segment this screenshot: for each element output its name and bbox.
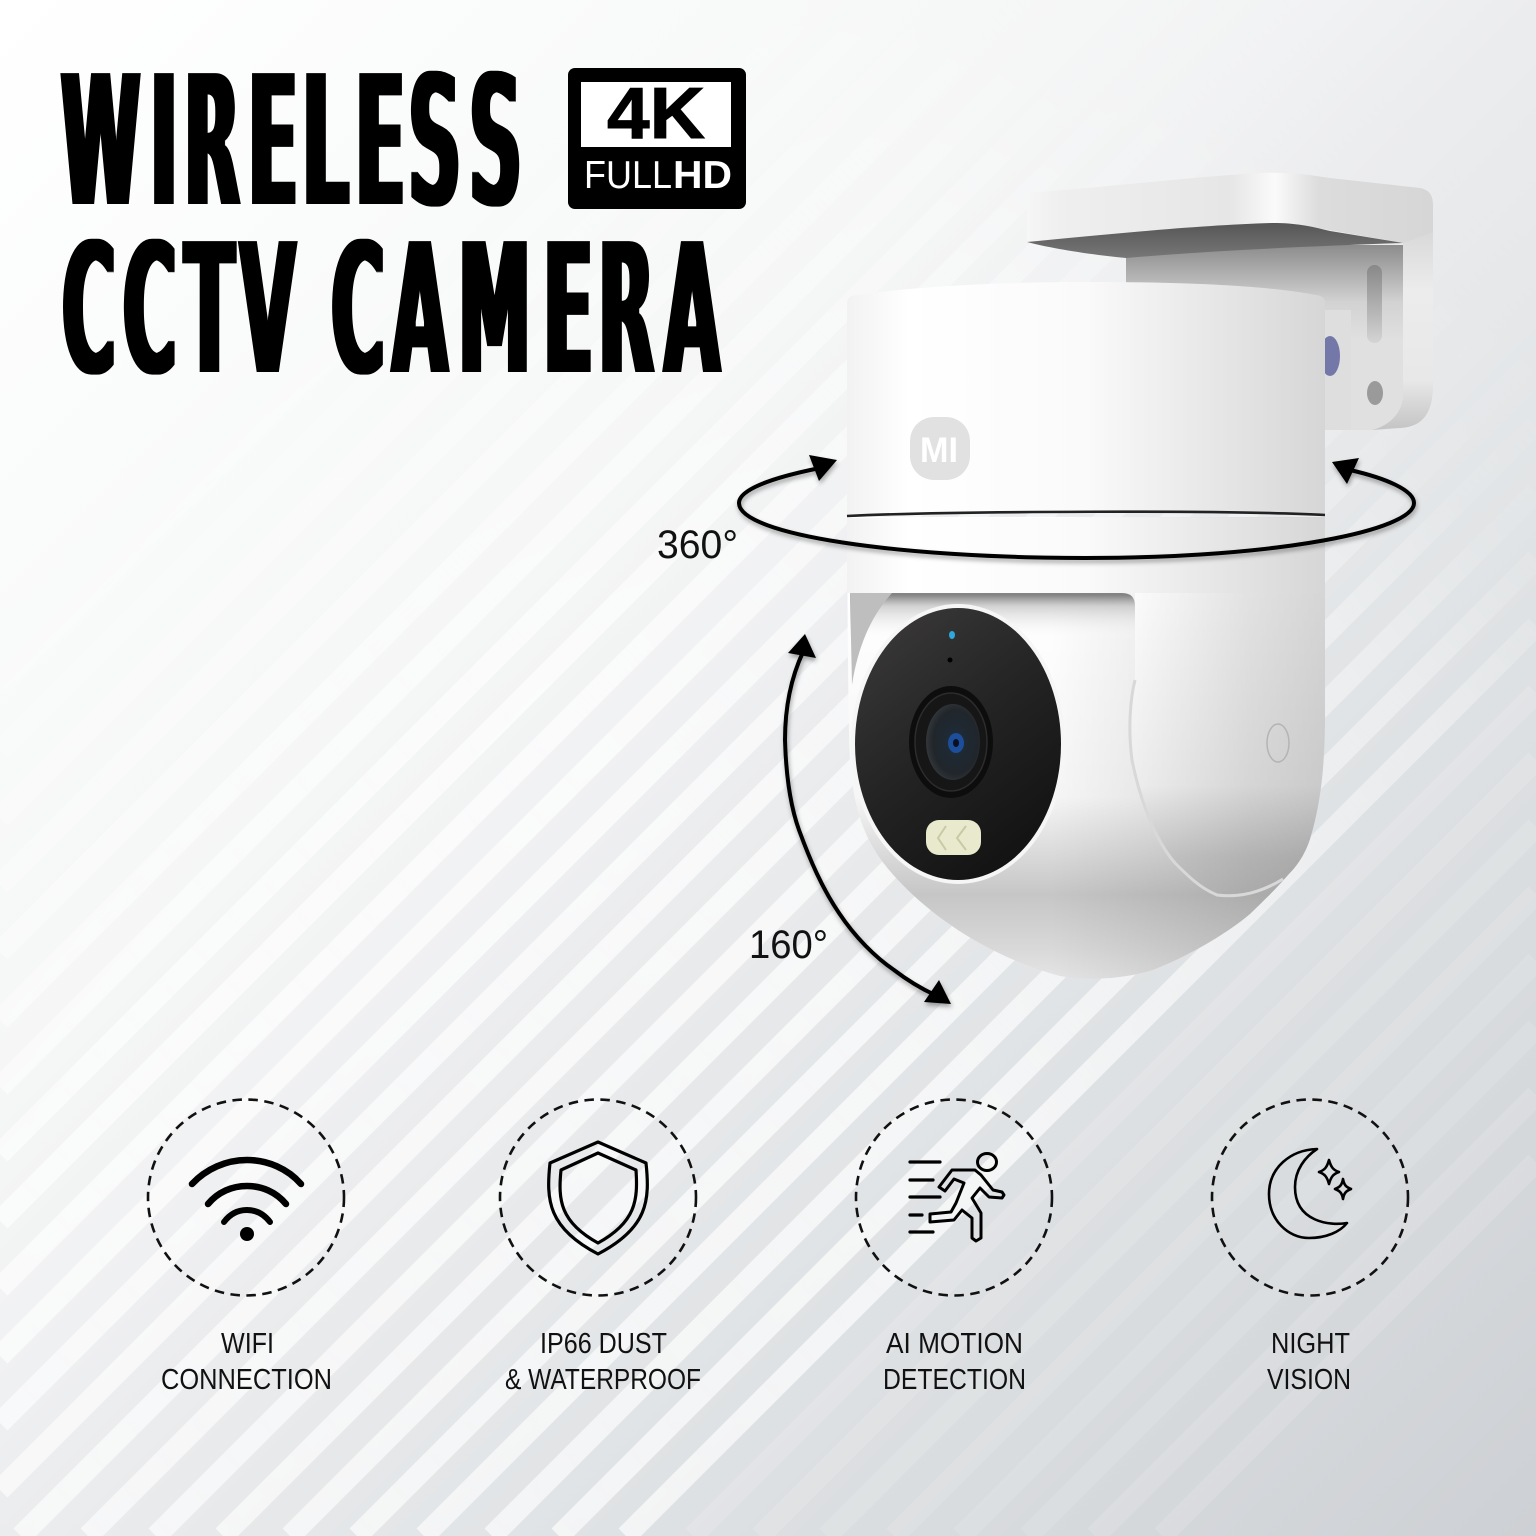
- label: [883, 1328, 1026, 1396]
- lens: [909, 686, 993, 798]
- indicator LED: [949, 631, 955, 639]
- feature: AI motion detection: [856, 1100, 1052, 1396]
- 360 degree rotation arrow: [739, 455, 1414, 558]
- head cylinder: [847, 282, 1325, 516]
- label: 160 degrees: 160°: [749, 923, 828, 967]
- feature: IP66 dust and waterproof: [500, 1100, 701, 1396]
- label: & WATERPROOF: [505, 1364, 701, 1396]
- label: AI MOTION: [886, 1328, 1023, 1360]
- label: [505, 1328, 701, 1396]
- Mi logo: MI: [920, 431, 958, 470]
- feature: night vision: [1212, 1100, 1408, 1396]
- title: WIRELESS CCTV CAMERA: [61, 36, 720, 419]
- badge: 4K Full HD: FULL: [584, 154, 672, 197]
- icon: wifi: [192, 1160, 301, 1241]
- title: WIRELESS CCTV CAMERA: WIRELESS: [61, 36, 522, 251]
- label: VISION: [1267, 1364, 1351, 1396]
- badge: 4K Full HD: 4K: [607, 74, 705, 154]
- camera product illustration: [847, 173, 1433, 979]
- title: WIRELESS CCTV CAMERA: CCTV CAMERA: [62, 204, 720, 419]
- flash light: [926, 820, 981, 855]
- label: [1267, 1328, 1351, 1396]
- icon: moon and stars: [1269, 1149, 1351, 1238]
- feature: wifi connection: [148, 1100, 344, 1396]
- reset button outline: [1267, 724, 1289, 762]
- label: 360 degrees: 360°: [657, 523, 738, 567]
- icon: running person: [910, 1154, 1004, 1241]
- recess corner: [850, 593, 892, 685]
- dark camera face: [851, 604, 1065, 884]
- microphone hole: [948, 658, 952, 662]
- lens opening recess: [850, 593, 1135, 660]
- Mi logo: [910, 417, 970, 480]
- label: WIFI: [221, 1328, 274, 1360]
- label: CONNECTION: [161, 1364, 332, 1396]
- icon: shield: [549, 1142, 647, 1254]
- wall bracket: [1027, 173, 1433, 430]
- right arm: [1130, 518, 1325, 896]
- label: DETECTION: [883, 1364, 1026, 1396]
- badge: 4K Full HD: [568, 68, 746, 209]
- badge: 4K Full HD: HD: [673, 154, 732, 197]
- 160 degree tilt arrow: [785, 634, 951, 1004]
- lower dome body: [847, 517, 1325, 979]
- label: IP66 DUST: [540, 1328, 667, 1360]
- seam: [847, 512, 1325, 516]
- label: [161, 1328, 332, 1396]
- label: NIGHT: [1271, 1328, 1350, 1360]
- neck band: [847, 518, 1325, 593]
